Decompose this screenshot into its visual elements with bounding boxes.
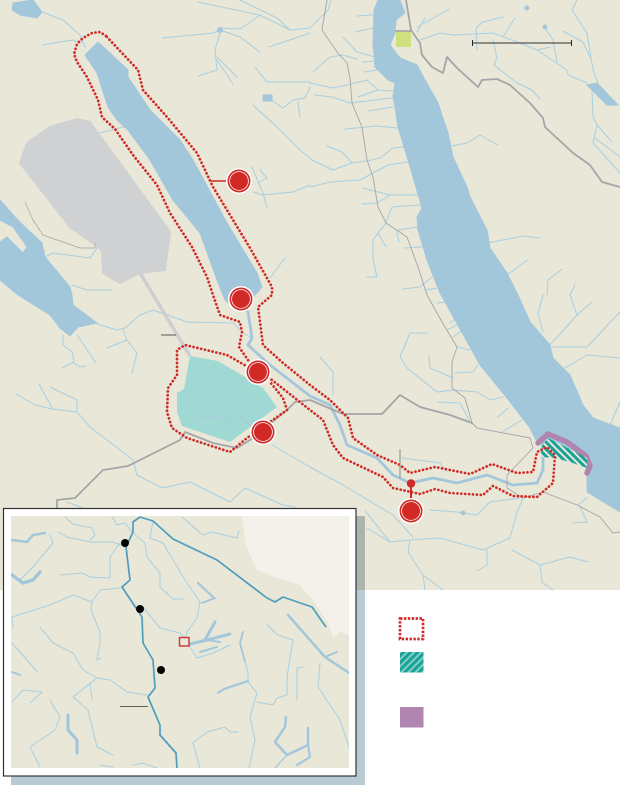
thin western road bbox=[25, 202, 95, 248]
inset main river bbox=[122, 517, 326, 768]
north-east road bbox=[406, 0, 620, 187]
inset city dot 2 bbox=[136, 605, 144, 613]
marker 1 with leader bbox=[211, 168, 252, 194]
marker 2 bbox=[228, 286, 254, 312]
inset locator map bbox=[4, 508, 356, 776]
inset city dot 3 bbox=[157, 666, 165, 674]
marker 4 bbox=[250, 419, 276, 445]
green town area bbox=[396, 32, 411, 47]
marker 5 with pin leader bbox=[398, 479, 424, 524]
red dotted boundary: reservoir bbox=[167, 345, 287, 452]
inset lakes bbox=[12, 533, 349, 768]
legend: hatched swatch bbox=[400, 652, 424, 672]
inset river label tick bbox=[120, 706, 148, 708]
inset streams bbox=[12, 517, 349, 768]
streams bbox=[16, 0, 620, 590]
south road bbox=[57, 395, 472, 510]
reservoir inner streams bbox=[194, 402, 252, 428]
lake: small north-west lake bbox=[12, 0, 42, 18]
glacier / grey area bbox=[20, 119, 170, 283]
scale bar bbox=[472, 40, 572, 46]
inset shadow bbox=[11, 516, 365, 785]
marker 3 bbox=[245, 359, 271, 385]
access strip bbox=[140, 273, 190, 356]
inset city dot 1 bbox=[121, 539, 129, 547]
inset location box bbox=[180, 638, 189, 646]
lake: narrow upper lake bbox=[85, 42, 262, 312]
town road branch bbox=[396, 30, 411, 32]
lake: small eastern lake bbox=[587, 83, 618, 105]
main map background bbox=[0, 0, 620, 590]
lake: western lake bbox=[0, 200, 97, 336]
thin road bbox=[322, 0, 620, 533]
purple lakeshore zone bbox=[538, 434, 590, 473]
inset pale neighbouring region bbox=[242, 516, 349, 638]
lake: main long lake bbox=[373, 0, 620, 512]
legend: dotted boundary swatch bbox=[400, 618, 423, 639]
red dotted boundary: corridor bbox=[74, 32, 555, 497]
river through corridor bbox=[240, 305, 543, 485]
inset land bbox=[11, 516, 349, 768]
legend: purple swatch bbox=[400, 707, 424, 728]
legend bbox=[400, 618, 424, 728]
reservoir bbox=[177, 356, 277, 442]
hatched zone bbox=[540, 438, 587, 468]
lake: tiny ponds bbox=[218, 6, 547, 515]
black tick: reservoir label bbox=[161, 334, 176, 336]
inset frame bbox=[4, 508, 356, 776]
grey tick: river label bbox=[399, 449, 401, 478]
